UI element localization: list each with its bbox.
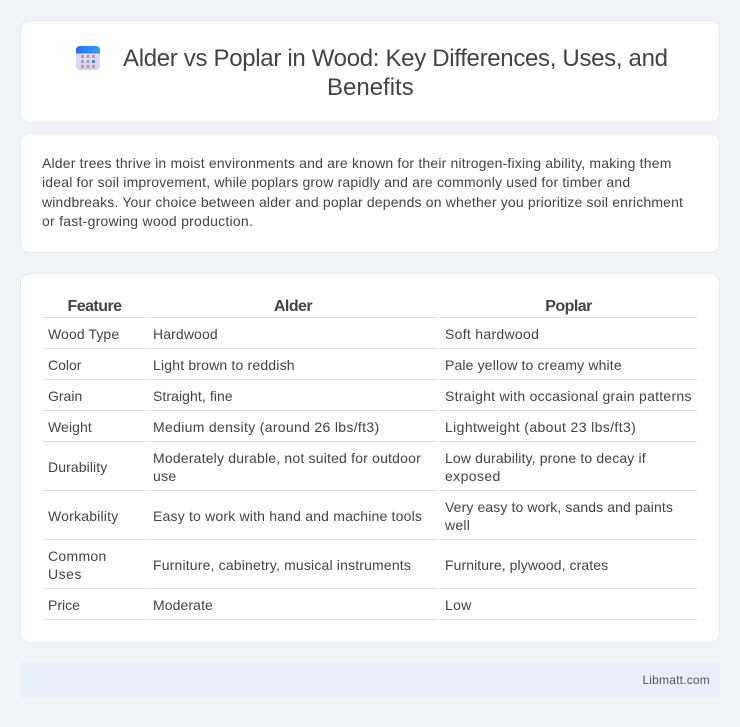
title (123, 45, 668, 101)
table rows: well (445, 517, 470, 533)
table rows: Durability (48, 459, 107, 475)
table rows: Straight, fine (153, 388, 233, 404)
table rows: Pale yellow to creamy white (445, 357, 622, 373)
table header: Alder (274, 298, 312, 315)
table rows: Furniture, plywood, crates (445, 557, 608, 573)
table rows: Light brown to reddish (153, 357, 295, 373)
panel: intro text (20, 133, 720, 253)
table rows: Workability (48, 508, 118, 524)
table rows: Low (445, 597, 472, 613)
table rows: Uses (48, 566, 82, 582)
table rows: Lightweight (about 23 lbs/ft3) (445, 419, 636, 435)
table rows: Weight (48, 419, 92, 435)
table header: Poplar (545, 298, 592, 315)
panel: comparison table (20, 273, 720, 643)
footer bar (20, 663, 720, 697)
table rows: Price (48, 597, 80, 613)
panel: title card (20, 20, 720, 123)
table rows: Furniture, cabinetry, musical instruments (153, 557, 411, 573)
intro paragraph: Alder trees thrive in moist environments and are known for their nitrogen-fixing ability, making them (42, 155, 672, 171)
table rows (43, 317, 697, 620)
intro paragraph: or fast-growing wood production. (42, 213, 253, 229)
table rows: Moderately durable, not suited for outdoor (153, 450, 421, 466)
table rows: Moderate (153, 597, 213, 613)
icon: calendar (76, 46, 100, 70)
table rows: Common (48, 548, 107, 564)
table rows: use (153, 468, 176, 484)
table rows: Very easy to work, sands and paints (445, 499, 673, 515)
title: Benefits (327, 74, 414, 101)
table header: Feature (68, 298, 121, 315)
intro paragraph (42, 155, 683, 229)
table rows: Color (48, 357, 81, 373)
intro paragraph: ideal for soil improvement, while poplars grow rapidly and are commonly used for timber and (42, 174, 630, 190)
table rows: Soft hardwood (445, 326, 539, 342)
table rows: Easy to work with hand and machine tools (153, 508, 422, 524)
intro paragraph: windbreaks. Your choice between alder and poplar depends on whether you prioritize soil enrichment (42, 194, 683, 210)
table rows: Wood Type (48, 326, 119, 342)
table rows: Medium density (around 26 lbs/ft3) (153, 419, 379, 435)
table rows: Grain (48, 388, 82, 404)
table rows: exposed (445, 468, 501, 484)
footer credit: Libmatt.com (642, 673, 710, 687)
table rows: Low durability, prone to decay if (445, 450, 646, 466)
table rows: Hardwood (153, 326, 218, 342)
title: Alder vs Poplar in Wood: Key Differences, Uses, and (123, 45, 668, 72)
table rows: Straight with occasional grain patterns (445, 388, 692, 404)
table header (68, 298, 592, 315)
